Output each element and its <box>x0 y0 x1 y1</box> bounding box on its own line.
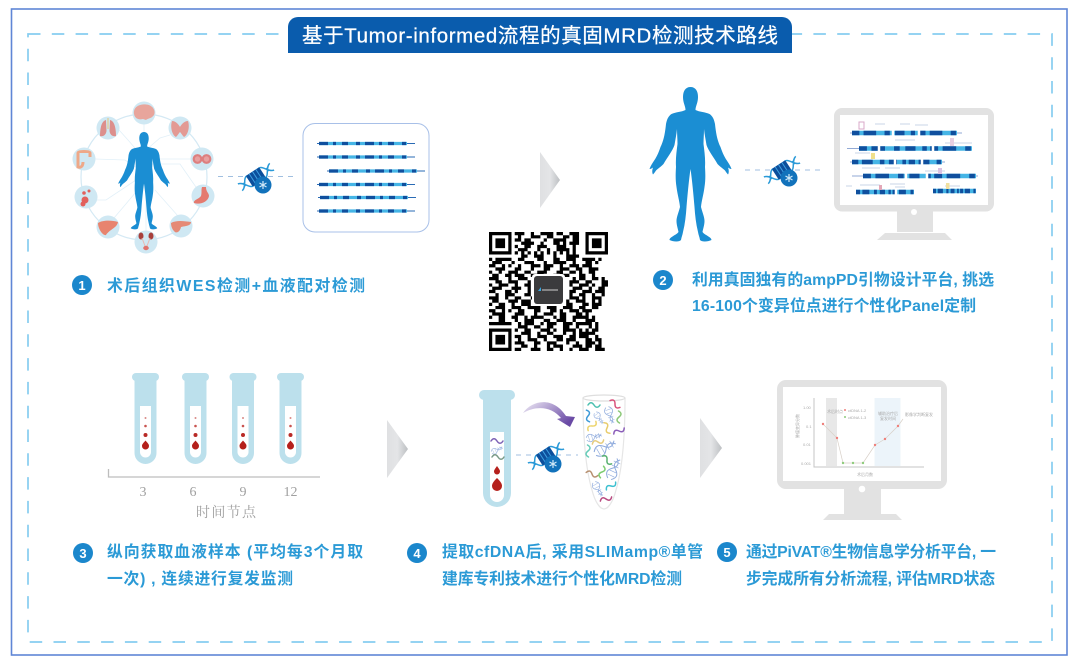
step 4 label <box>407 542 703 588</box>
line chart: 辅助治疗后 <box>878 410 898 416</box>
step 5 label <box>717 542 996 588</box>
monitor with MRD chart <box>777 380 947 520</box>
line chart: 肿瘤变异分数 <box>794 414 800 438</box>
icon: human body small <box>118 132 170 229</box>
step 4 label: 4 <box>413 546 421 561</box>
icon: blood cells <box>74 186 98 208</box>
step 2 label: 16-100个变异位点进行个性化Panel定制 <box>692 296 976 315</box>
QR code <box>489 234 608 349</box>
line chart: 0.001 <box>801 461 812 466</box>
step 2 label: 2 <box>659 273 667 288</box>
step 4 label: 提取cfDNA后, 采用SLIMamp®单管 <box>442 542 703 561</box>
arrow: curved purple <box>523 402 575 427</box>
step 1 label: 1 <box>78 278 86 293</box>
title: 基于Tumor-informed流程的真固MRD检测技术路线 <box>302 24 778 48</box>
step 1 illustration: organs and body <box>72 102 214 254</box>
step 3 label: 一次) , 连续进行复发监测 <box>107 569 293 588</box>
step 3 illustration: blood tubes timeline: 6 <box>190 485 196 500</box>
step 2 label: 利用真固独有的ampPD引物设计平台, 挑选 <box>692 270 994 289</box>
line chart: 影像学判断复发 <box>905 411 933 417</box>
icon: stomach <box>192 184 214 208</box>
dashed link with DNA icon step 1 <box>218 161 297 194</box>
step 2 illustration: human body <box>650 87 732 242</box>
icon: lungs <box>96 116 120 140</box>
icon: ovaries <box>190 148 214 170</box>
step 1 label: 术后组织WES检测+血液配对检测 <box>107 276 365 295</box>
icon: colon <box>72 148 96 170</box>
step 3 illustration: blood tubes timeline: 时间节点 <box>196 504 257 521</box>
title <box>288 17 792 53</box>
icon: brain <box>132 102 156 124</box>
panel: sequencing reads <box>303 124 429 232</box>
arrow: step 1 to 2 <box>540 152 560 208</box>
line chart: ctDNA 1-3 <box>848 415 867 420</box>
step 2 label <box>653 270 994 315</box>
line chart: 术后时点 <box>827 408 843 414</box>
step 3 label <box>73 542 363 588</box>
step 3 illustration: blood tubes timeline: 12 <box>284 485 298 500</box>
line chart: 1.00 <box>803 405 812 410</box>
line chart: ctDNA 1-2 <box>848 408 867 413</box>
line chart <box>794 398 933 477</box>
dashed link with DNA icon step 2 <box>745 154 825 186</box>
line chart: 0.01 <box>803 442 812 447</box>
step 3 label: 纵向获取血液样本 (平均每3个月取 <box>107 542 363 561</box>
step 3 illustration: blood tubes timeline: 9 <box>240 485 246 500</box>
arrow: step 4 to 5 <box>700 418 722 478</box>
step 3 label: 3 <box>79 546 87 561</box>
monitor with personalised panel <box>834 108 994 240</box>
icon: liver <box>96 216 120 238</box>
line chart: 术后月数 <box>857 471 873 477</box>
line chart: 0.1 <box>806 424 812 429</box>
step 3 illustration: blood tubes timeline <box>108 373 320 521</box>
library tube with fragments <box>583 395 625 509</box>
step 3 illustration: blood tubes timeline: 3 <box>140 485 146 500</box>
step 4 label: 建库专利技术进行个性化MRD检测 <box>442 569 682 588</box>
icon: pancreas <box>170 214 192 238</box>
icon: thyroid <box>168 116 192 140</box>
arrow: step 3 to 4 <box>387 420 408 478</box>
step 5 label: 5 <box>723 545 731 560</box>
icon: kidneys <box>134 230 158 254</box>
dashed link with DNA icon step 4 <box>516 440 578 472</box>
line chart: 复发时间 <box>880 415 896 421</box>
step 5 label: 步完成所有分析流程, 评估MRD状态 <box>746 569 995 588</box>
step 5 label: 通过PiVAT®生物信息学分析平台, 一 <box>746 542 996 561</box>
step 4 illustration: cfDNA tube <box>479 390 515 507</box>
QR logo <box>532 274 565 306</box>
